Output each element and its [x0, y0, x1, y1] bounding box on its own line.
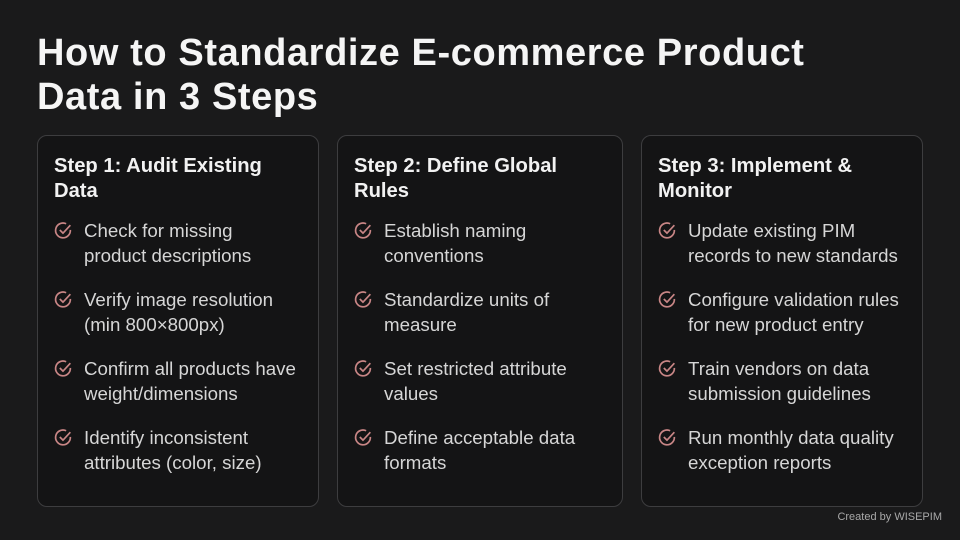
item 4: [658, 427, 894, 473]
item 4: [354, 427, 576, 473]
item 4: attributes (color, size): [84, 452, 262, 473]
item 3: Confirm all products have: [84, 358, 296, 379]
item 2: (min 800×800px): [84, 314, 225, 335]
item 2: Verify image resolution: [84, 289, 273, 310]
item 1: product descriptions: [84, 245, 251, 266]
title: How to Standardize E-commerce Product: [37, 32, 805, 74]
item 4: formats: [384, 452, 446, 473]
item 3: [54, 358, 296, 404]
item 4: exception reports: [688, 452, 831, 473]
panel: step 1: [37, 135, 319, 507]
item 4: Run monthly data quality: [688, 427, 894, 448]
item 2: Configure validation rules: [688, 289, 899, 310]
item 3: Set restricted attribute: [384, 358, 567, 379]
heading: step 3: [658, 155, 852, 202]
title: [37, 32, 805, 118]
title: Data in 3 Steps: [37, 76, 318, 118]
item 1: records to new standards: [688, 245, 898, 266]
heading: step 2: Step 2: Define Global: [354, 155, 557, 177]
item 3: weight/dimensions: [84, 383, 238, 404]
item 1: [658, 220, 898, 266]
item 1: Establish naming: [384, 220, 526, 241]
item 1: [354, 220, 526, 266]
item 4: [54, 427, 262, 473]
heading: step 3: Monitor: [658, 180, 732, 202]
item 1: Check for missing: [84, 220, 233, 241]
item 2: [658, 289, 899, 335]
item 2: [54, 289, 273, 335]
item 2: Standardize units of: [384, 289, 549, 310]
item 3: values: [384, 383, 438, 404]
item 2: [354, 289, 550, 335]
item 3: [658, 358, 871, 404]
panel: step 2: [337, 135, 623, 507]
credit: Created by WISEPIM: [837, 511, 942, 523]
heading: step 3: Step 3: Implement &: [658, 155, 852, 177]
item 3: [354, 358, 567, 404]
heading: step 1: Data: [54, 180, 98, 202]
panel: step 3: [641, 135, 923, 507]
item 2: for new product entry: [688, 314, 864, 335]
heading: step 1: [54, 155, 262, 202]
item 2: measure: [384, 314, 457, 335]
item 1: [54, 220, 251, 266]
item 1: Update existing PIM: [688, 220, 855, 241]
item 1: conventions: [384, 245, 484, 266]
heading: step 2: Rules: [354, 180, 409, 202]
item 4: Define acceptable data: [384, 427, 575, 448]
item 3: Train vendors on data: [688, 358, 869, 379]
item 3: submission guidelines: [688, 383, 871, 404]
item 4: Identify inconsistent: [84, 427, 248, 448]
heading: step 1: Step 1: Audit Existing: [54, 155, 262, 177]
heading: step 2: [354, 155, 557, 202]
